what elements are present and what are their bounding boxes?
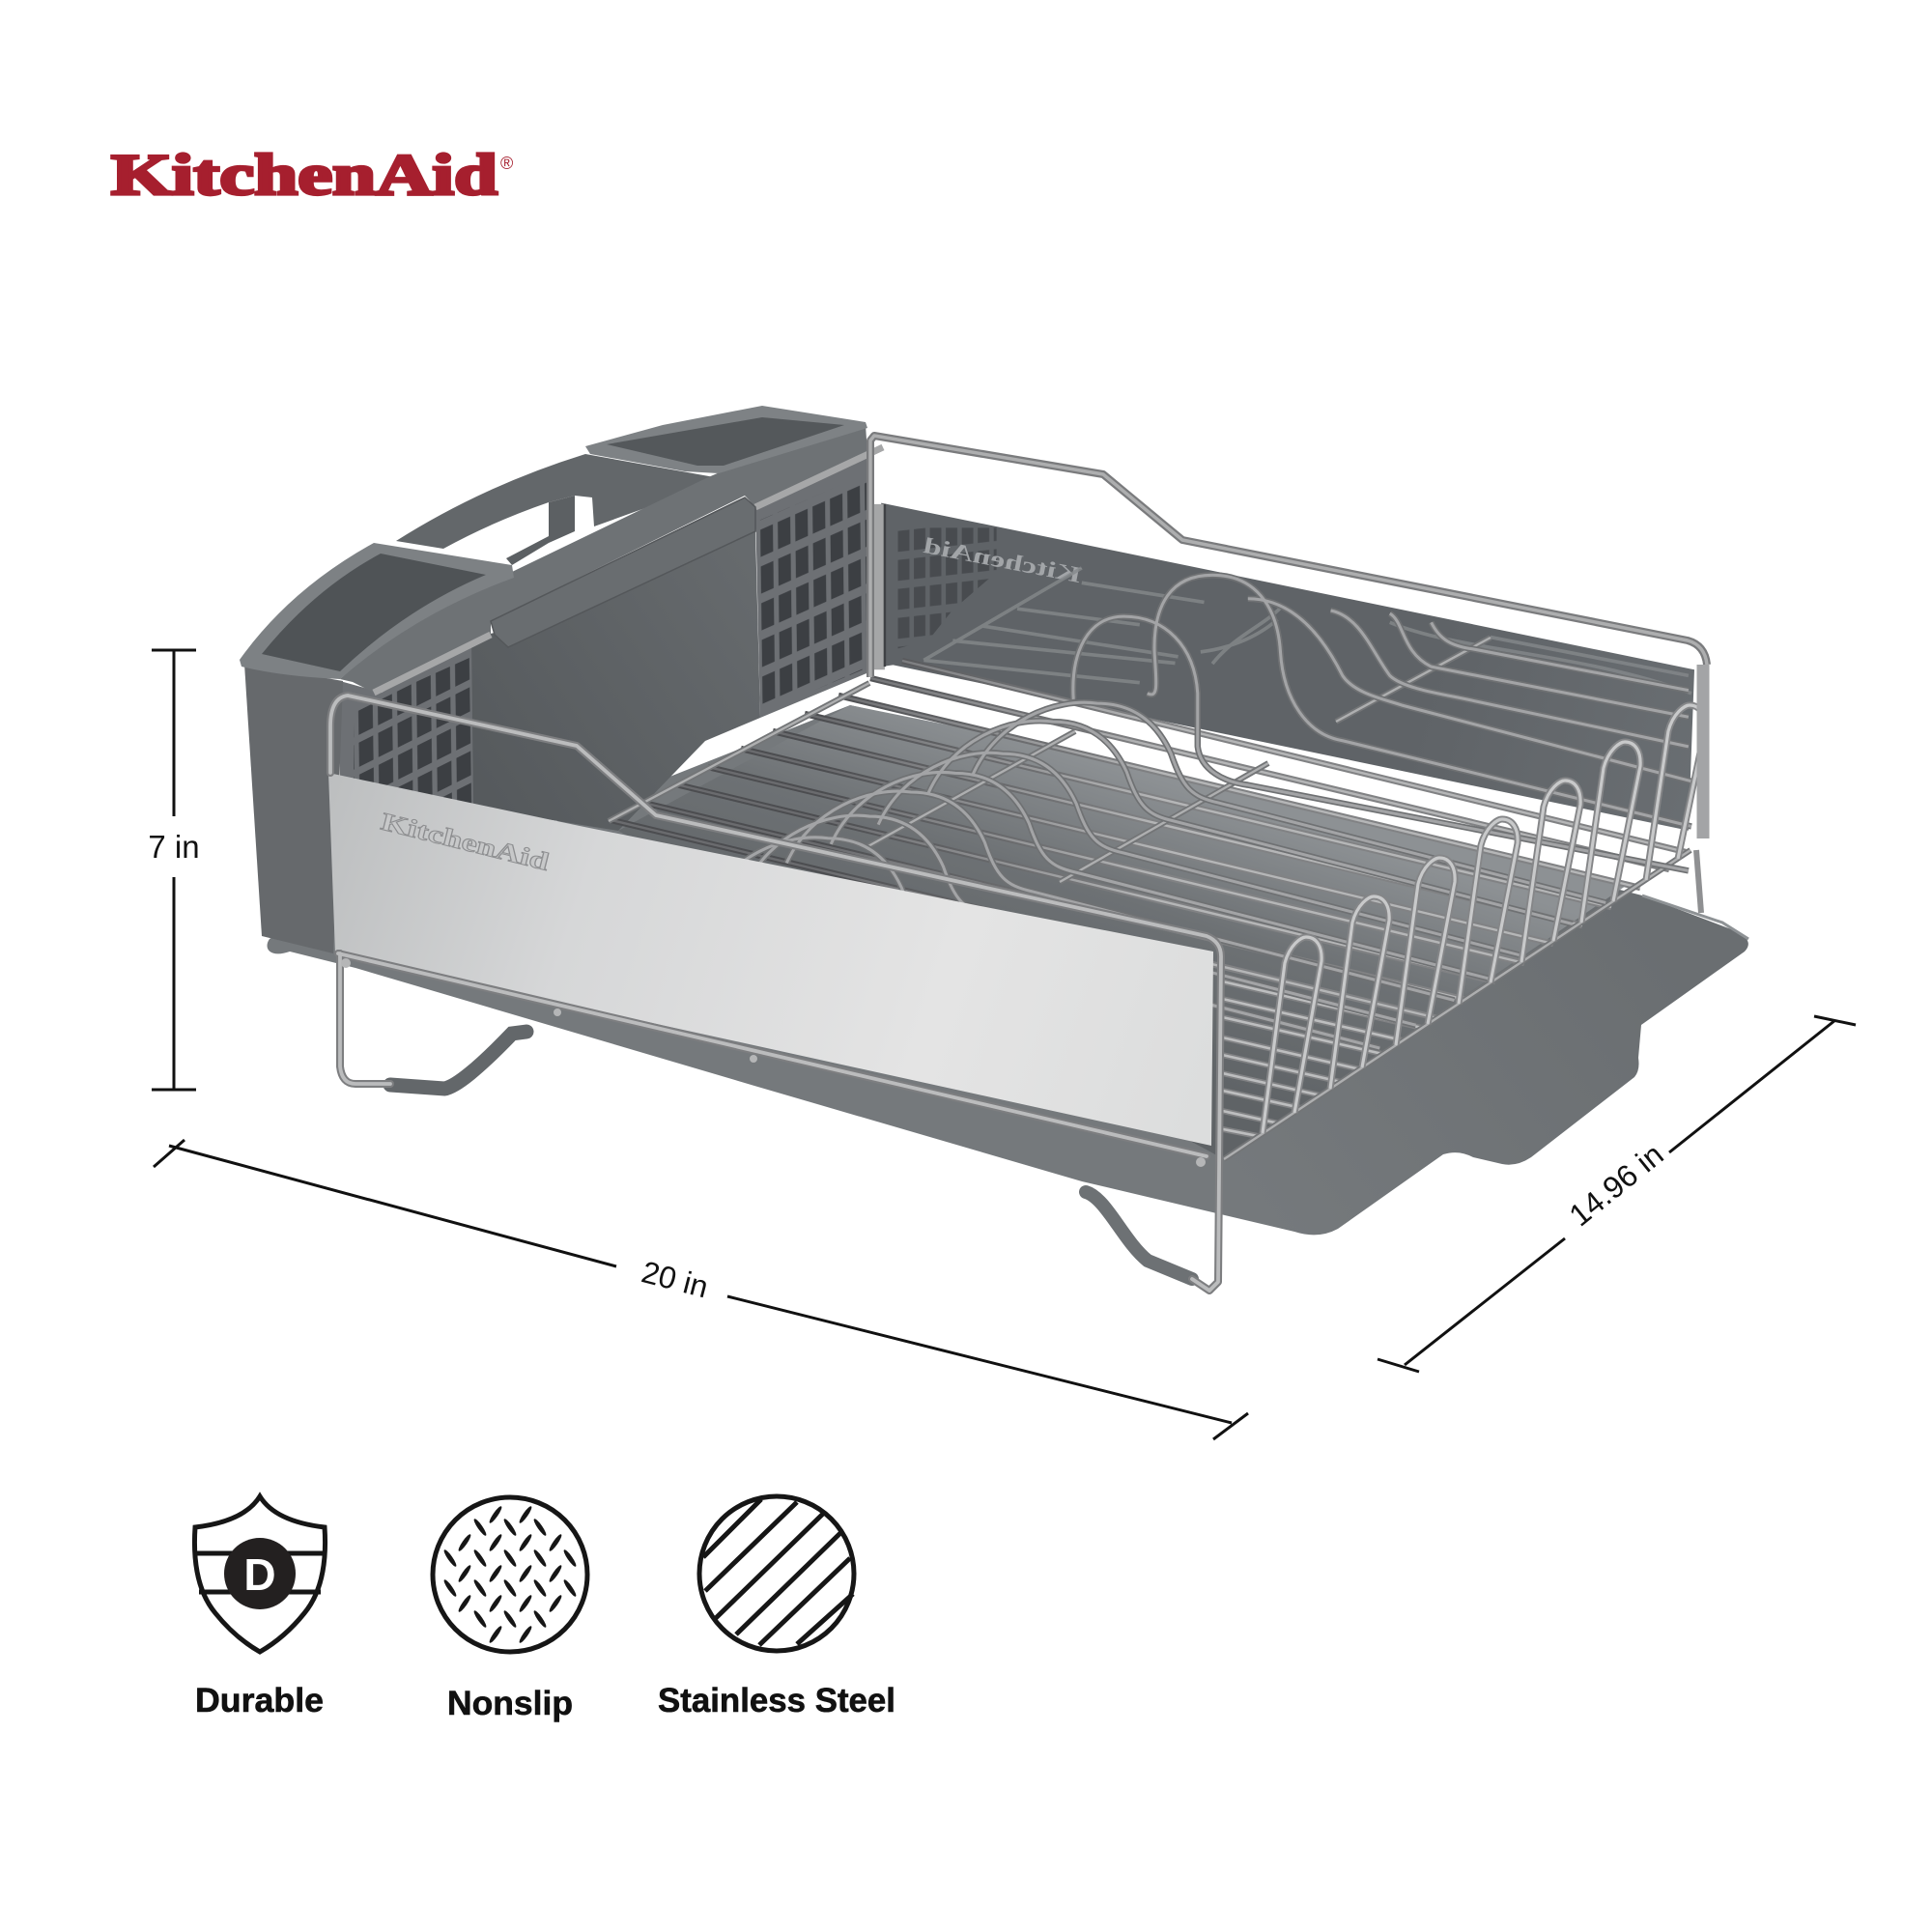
steel front panel xyxy=(328,773,1213,1146)
brand logo: KitchenAid xyxy=(111,143,497,207)
left caddy body xyxy=(244,664,343,953)
label: nonslip: Nonslip xyxy=(447,1685,573,1722)
left grid holes xyxy=(354,657,476,816)
right grid backing xyxy=(755,454,871,718)
plate arches xyxy=(1263,705,1705,1133)
steel bars xyxy=(374,447,883,693)
rivets xyxy=(341,958,1206,1167)
dimension: depth 14.96 in xyxy=(1378,1016,1856,1372)
label: stainless steel: Stainless Steel xyxy=(658,1682,895,1719)
back panel xyxy=(867,503,1694,831)
humped plate wires xyxy=(704,575,1694,1048)
back caddy well xyxy=(607,417,844,466)
embossed logo: KitchenAid xyxy=(379,808,553,876)
product: dish rack xyxy=(240,406,1748,1291)
left caddy rim xyxy=(240,543,514,679)
icon: nonslip circle xyxy=(433,1497,587,1652)
middle divider panel xyxy=(471,531,760,831)
divider top band xyxy=(340,425,867,693)
left grid backing xyxy=(340,638,478,813)
back frame wire xyxy=(870,436,1707,913)
icon: stainless steel circle xyxy=(699,1496,854,1651)
right grid holes xyxy=(756,473,870,713)
rubber sleeve xyxy=(491,497,755,647)
dimension: height 7 in xyxy=(148,650,200,1090)
icon: durable shield xyxy=(194,1496,326,1652)
handle post xyxy=(506,496,575,565)
front frame wire xyxy=(330,696,1221,1291)
label: durable: Durable xyxy=(195,1682,324,1719)
front foot xyxy=(390,1032,526,1089)
dimension: height 7 in: 7 in xyxy=(148,829,200,865)
left caddy well xyxy=(262,554,486,671)
floor wires xyxy=(609,638,1690,1159)
brand logo: ® xyxy=(500,154,513,173)
dimension: width 20 in: 20 in xyxy=(639,1254,712,1304)
tray lip highlight xyxy=(1642,895,1748,939)
tray floor xyxy=(618,705,1626,1159)
dimension: width 20 in xyxy=(154,1140,1248,1439)
back handle band xyxy=(396,454,720,549)
back panel: KitchenAid xyxy=(922,533,1083,588)
dimension: depth 14.96 in: 14.96 in xyxy=(1563,1137,1670,1233)
drip tray xyxy=(268,705,1748,1235)
icon: durable shield: D xyxy=(243,1549,276,1600)
back foot xyxy=(1086,1192,1192,1279)
back caddy rim xyxy=(585,406,867,473)
